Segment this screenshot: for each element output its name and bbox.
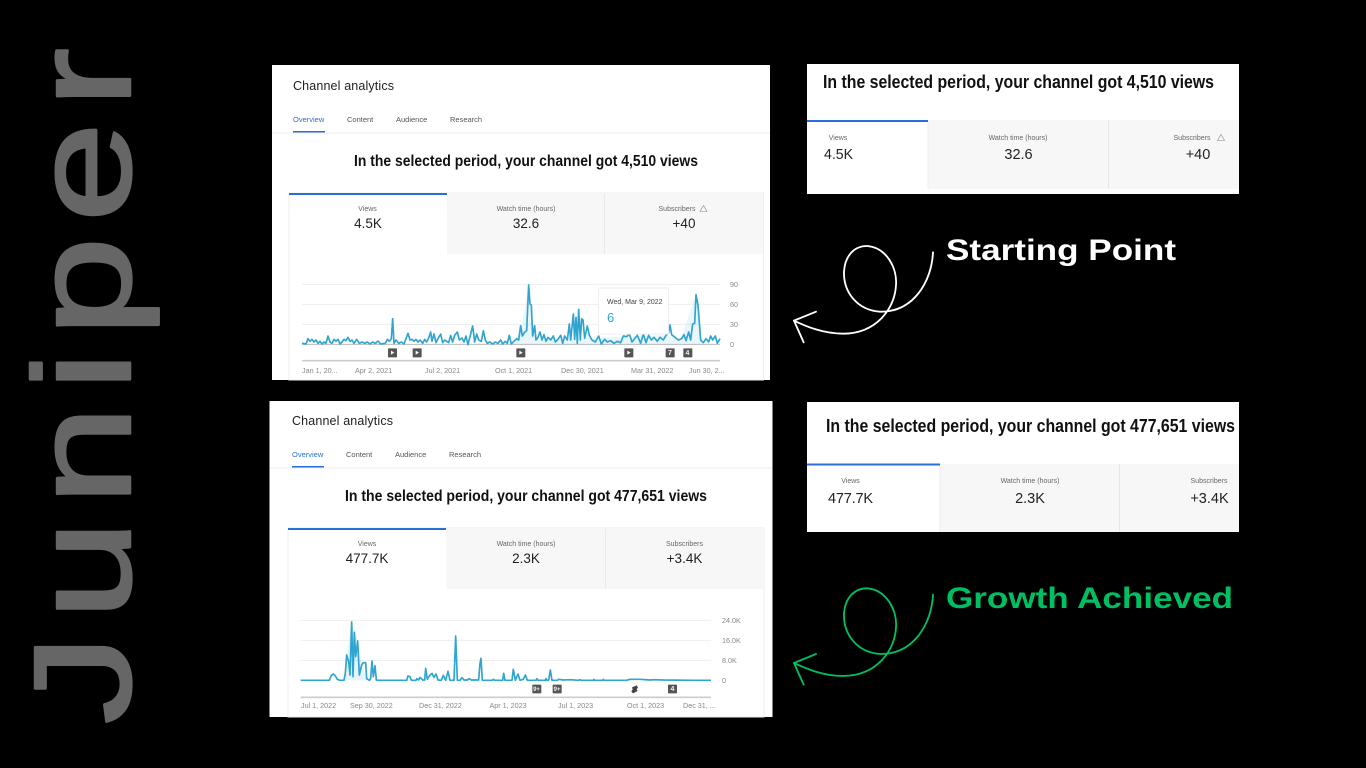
metric cards <box>807 120 1239 189</box>
panel: starting analytics screenshot <box>272 65 770 380</box>
metric cards <box>807 464 1239 532</box>
headline: 477,651 views: In the selected period, your channel got 477,651 views <box>826 415 1235 436</box>
panel heading: channel analytics: Channel analytics <box>292 414 393 428</box>
line chart: daily views 2022 to 2023: Sep 30, 2022 <box>350 701 393 710</box>
line chart: daily views 2021 to 2022: Jun 30, 2... <box>689 366 725 375</box>
line chart: daily views 2022 to 2023: 0 <box>722 676 726 685</box>
line chart: daily views 2022 to 2023: 16.0K <box>722 636 741 645</box>
headline: 4,510 views: In the selected period, your channel got 4,510 views <box>823 71 1214 92</box>
line chart: daily views 2021 to 2022: 4 <box>686 350 690 357</box>
metric cards: Watch time (hours) <box>497 206 555 213</box>
navigation tabs: Research <box>450 115 482 124</box>
metric cards: Views <box>829 135 848 142</box>
metric cards: 2.3K <box>1015 491 1045 507</box>
metric cards: Subscribers <box>666 541 703 548</box>
navigation tabs: Content <box>346 450 373 459</box>
line chart: daily views 2022 to 2023: 9+ <box>533 687 540 693</box>
headline: 4,510 views: In the selected period, your channel got 4,510 views <box>354 153 698 170</box>
arrow: green curl pointing to the growth screenshot <box>794 588 933 685</box>
metric cards: 4.5K <box>824 147 853 163</box>
line chart: daily views 2021 to 2022: Mar 31, 2022 <box>631 366 673 375</box>
panel: summary of growth metrics <box>807 402 1239 532</box>
line chart: daily views 2021 to 2022: Jul 2, 2021 <box>425 366 460 375</box>
metric cards: Views <box>358 541 377 548</box>
navigation tabs: Research <box>449 450 481 459</box>
panel: summary of starting metrics <box>807 64 1239 194</box>
line chart: daily views 2021 to 2022 <box>302 280 738 375</box>
metric cards: Subscribers <box>1174 135 1211 142</box>
line chart: daily views 2022 to 2023: Jul 1, 2022 <box>301 701 336 710</box>
line chart: daily views 2022 to 2023: Jul 1, 2023 <box>558 701 593 710</box>
metric cards: Watch time (hours) <box>1001 478 1059 485</box>
metric cards: +40 <box>1186 147 1210 163</box>
metric cards: 477.7K <box>828 491 873 507</box>
metric cards: Watch time (hours) <box>989 135 1047 142</box>
navigation tabs: Overview <box>293 115 325 124</box>
metric cards: 32.6 <box>1004 147 1033 163</box>
metric cards: Subscribers <box>1191 478 1228 485</box>
line chart: daily views 2022 to 2023: 9+ <box>554 687 561 693</box>
arrow: white curl pointing to the starting screenshot <box>794 246 933 342</box>
headline: 477,651 views: In the selected period, your channel got 477,651 views <box>345 488 707 505</box>
line chart: daily views 2022 to 2023: Apr 1, 2023 <box>490 701 527 710</box>
navigation tabs: Audience <box>396 115 427 124</box>
line chart: daily views 2021 to 2022: 30 <box>730 320 738 329</box>
metric cards <box>289 193 764 380</box>
line chart: daily views 2022 to 2023: 8.0K <box>722 656 737 665</box>
metric cards: 4.5K <box>354 216 382 231</box>
line chart: daily views 2022 to 2023: Dec 31, 2022 <box>419 701 462 710</box>
metric cards: 477.7K <box>346 551 388 566</box>
line chart: daily views 2021 to 2022: Oct 1, 2021 <box>495 366 532 375</box>
metric cards: Views <box>358 206 377 213</box>
line chart: daily views 2021 to 2022: 60 <box>730 300 738 309</box>
metric cards: +3.4K <box>1190 491 1229 507</box>
line chart: daily views 2022 to 2023: 4 <box>671 686 675 693</box>
vertical brand title: Juniper: Juniper <box>5 48 159 724</box>
metric cards: 32.6 <box>513 216 539 231</box>
navigation tabs <box>270 450 772 468</box>
metric cards: Watch time (hours) <box>497 541 555 548</box>
tooltip: Wed, Mar 9, 2022 <box>598 288 668 334</box>
panel: growth analytics screenshot <box>270 401 772 717</box>
navigation tabs: Content <box>347 115 374 124</box>
line chart: daily views 2021 to 2022: Dec 30, 2021 <box>561 366 604 375</box>
line chart: daily views 2022 to 2023: Dec 31, ... <box>683 701 716 710</box>
line chart: daily views 2021 to 2022: Apr 2, 2021 <box>355 366 392 375</box>
label: Starting Point: Starting Point <box>946 234 1176 267</box>
metric cards <box>288 528 764 717</box>
navigation tabs: Overview <box>292 450 324 459</box>
metric cards: Subscribers <box>659 206 696 213</box>
tooltip: Wed, Mar 9, 2022: Wed, Mar 9, 2022 <box>607 299 663 306</box>
panel heading: channel analytics: Channel analytics <box>293 79 394 93</box>
label: Growth Achieved: Growth Achieved <box>946 582 1233 615</box>
navigation tabs: Audience <box>395 450 426 459</box>
tooltip: Wed, Mar 9, 2022: 6 <box>607 310 614 325</box>
line chart: daily views 2022 to 2023: 24.0K <box>722 616 741 625</box>
metric cards: 2.3K <box>512 551 540 566</box>
line chart: daily views 2021 to 2022: Jan 1, 20... <box>302 366 338 375</box>
line chart: daily views 2021 to 2022: 90 <box>730 280 738 289</box>
metric cards: +40 <box>673 216 695 231</box>
line chart: daily views 2022 to 2023 <box>301 616 741 710</box>
video markers <box>388 348 692 357</box>
line chart: daily views 2022 to 2023: Oct 1, 2023 <box>627 701 664 710</box>
metric cards: +3.4K <box>667 551 702 566</box>
line chart: daily views 2021 to 2022: 0 <box>730 340 734 349</box>
video markers <box>532 685 677 693</box>
navigation tabs <box>272 115 770 134</box>
line chart: daily views 2021 to 2022: 7 <box>668 350 672 357</box>
metric cards: Views <box>841 478 860 485</box>
